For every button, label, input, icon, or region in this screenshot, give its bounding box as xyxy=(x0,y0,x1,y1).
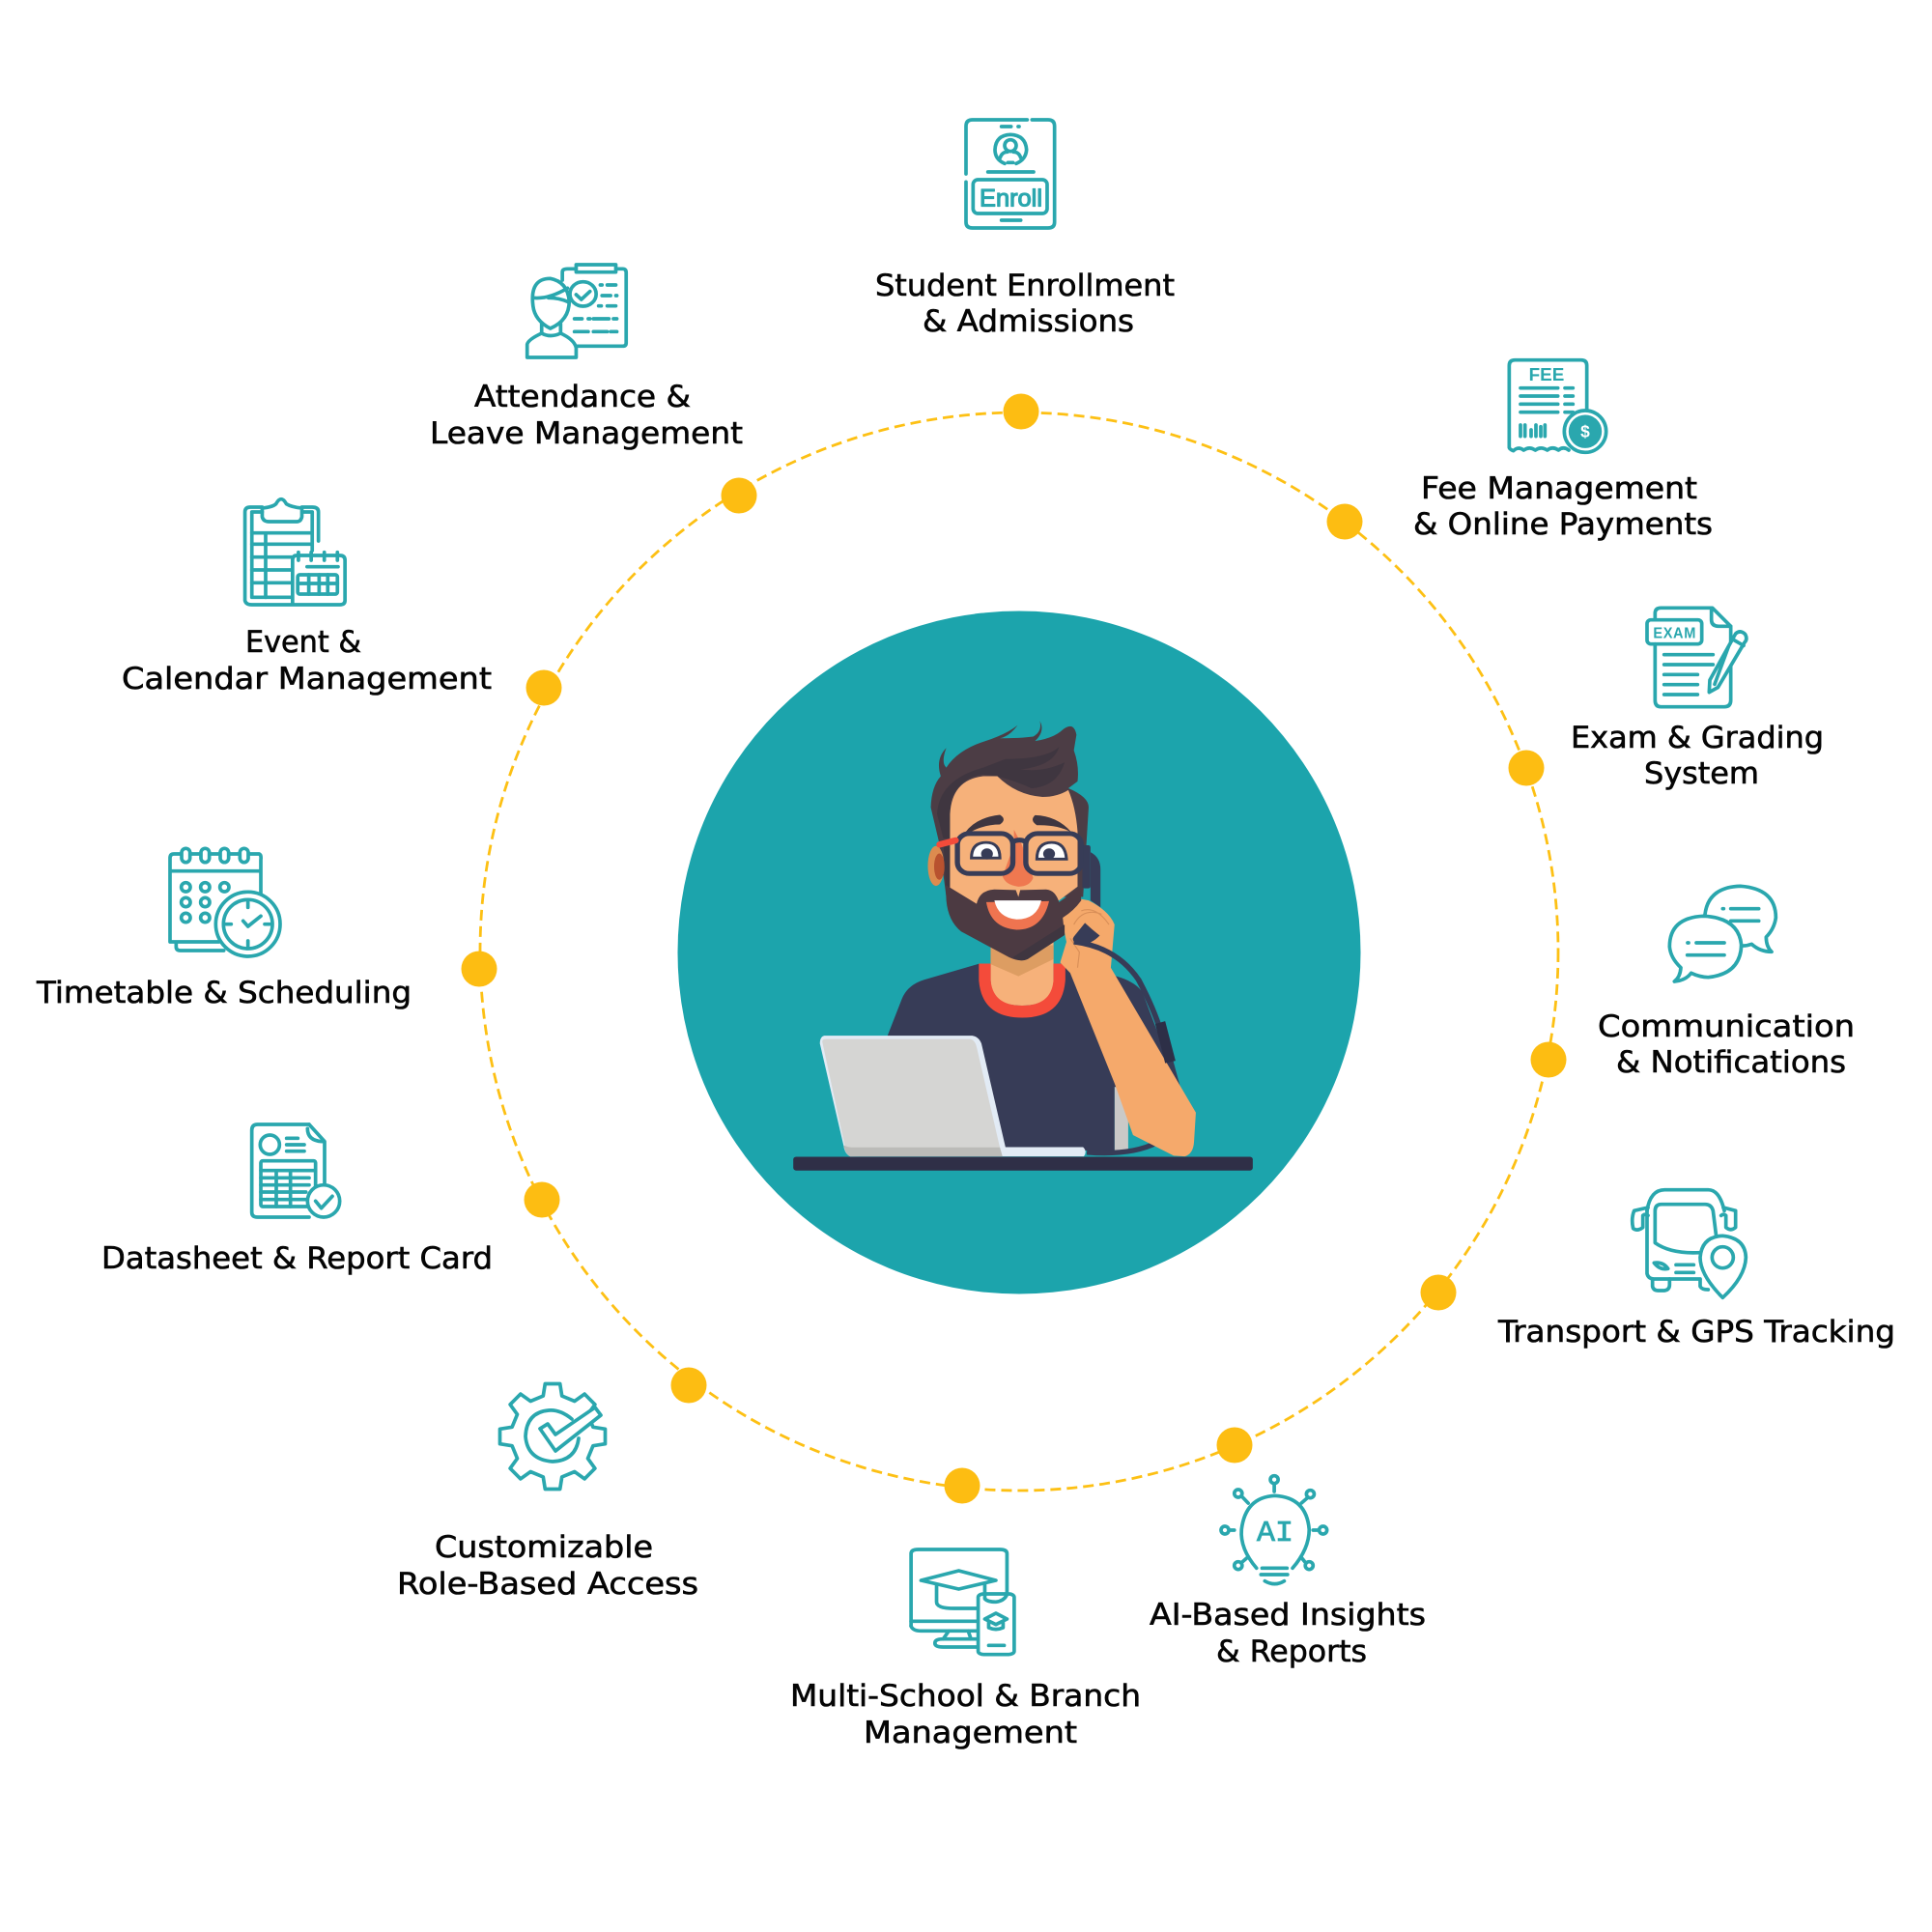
icon: enroll tablet xyxy=(966,120,1055,228)
item: AI insights xyxy=(1150,1476,1426,1669)
icon: enroll tablet: Enroll xyxy=(980,185,1042,212)
icon: datasheet with check xyxy=(252,1124,340,1217)
label: communication: & Notifications xyxy=(1616,1045,1846,1080)
label: exam and grading: System xyxy=(1644,756,1759,791)
label: AI insights: AI-Based Insights xyxy=(1150,1598,1426,1633)
item: transport and GPS xyxy=(1497,1190,1895,1350)
icon: monitor with graduation cap and phone xyxy=(911,1549,1014,1655)
icon: gear with check xyxy=(500,1383,605,1490)
label: attendance: Attendance & xyxy=(474,380,691,414)
item: event calendar xyxy=(122,499,492,696)
label: multi-school xyxy=(790,1679,1141,1750)
icon: fee receipt with coin xyxy=(1509,360,1606,452)
illustration: man on phone with laptop xyxy=(793,721,1253,1171)
label: timetable: Timetable & Scheduling xyxy=(36,976,412,1010)
item: datasheet xyxy=(101,1124,493,1276)
label: multi-school: Multi-School & Branch xyxy=(790,1679,1141,1714)
label: exam and grading: Exam & Grading xyxy=(1571,721,1824,755)
label: communication: Communication xyxy=(1598,1009,1855,1044)
icon: fee receipt with coin: $ xyxy=(1580,422,1590,441)
label: fee management: & Online Payments xyxy=(1413,507,1713,542)
item: multi-school xyxy=(790,1549,1141,1750)
label: event calendar: Calendar Management xyxy=(122,662,492,696)
icon: fee receipt with coin: FEE xyxy=(1529,364,1564,384)
label: student enrollment xyxy=(875,269,1175,339)
label: fee management xyxy=(1413,471,1713,542)
label: student enrollment: & Admissions xyxy=(923,304,1134,339)
label: role-based access: Customizable xyxy=(435,1530,653,1565)
label: event calendar: Event & xyxy=(245,625,361,660)
icon: calendar with clock xyxy=(170,848,280,956)
item: timetable xyxy=(36,848,412,1010)
central teal circle xyxy=(678,611,1360,1294)
label: role-based access xyxy=(397,1530,698,1602)
icon: AI light bulb: AI xyxy=(1257,1517,1293,1550)
item: communication xyxy=(1598,886,1855,1080)
label: transport and GPS: Transport & GPS Tracking xyxy=(1497,1315,1895,1350)
label: communication xyxy=(1598,1009,1855,1080)
label: multi-school: Management xyxy=(864,1716,1077,1750)
item: role-based access xyxy=(397,1383,698,1602)
icon: clipboard with calendar xyxy=(245,499,345,605)
label: fee management: Fee Management xyxy=(1421,471,1697,506)
label: attendance: Leave Management xyxy=(430,416,743,451)
item: exam and grading xyxy=(1571,608,1824,791)
icon: exam paper with pencil xyxy=(1647,608,1747,707)
icon: exam paper with pencil: EXAM xyxy=(1653,625,1696,641)
label: event calendar xyxy=(122,625,492,696)
dashed ring with nodes xyxy=(462,394,1567,1503)
item: fee management xyxy=(1413,360,1713,542)
label: role-based access: Role-Based Access xyxy=(397,1567,698,1602)
label: student enrollment: Student Enrollment xyxy=(875,269,1175,303)
icon: bus with location pin xyxy=(1633,1190,1746,1297)
label: attendance xyxy=(430,380,743,451)
label: datasheet: Datasheet & Report Card xyxy=(101,1241,493,1276)
icon: AI light bulb xyxy=(1221,1476,1327,1584)
icon: chat bubbles xyxy=(1669,886,1776,981)
label: exam and grading xyxy=(1571,721,1824,791)
label: AI insights: & Reports xyxy=(1216,1634,1367,1669)
item: attendance xyxy=(430,265,743,451)
label: AI insights xyxy=(1150,1598,1426,1669)
icon: person with attendance sheet xyxy=(527,265,626,357)
item: student enrollment xyxy=(875,120,1175,339)
